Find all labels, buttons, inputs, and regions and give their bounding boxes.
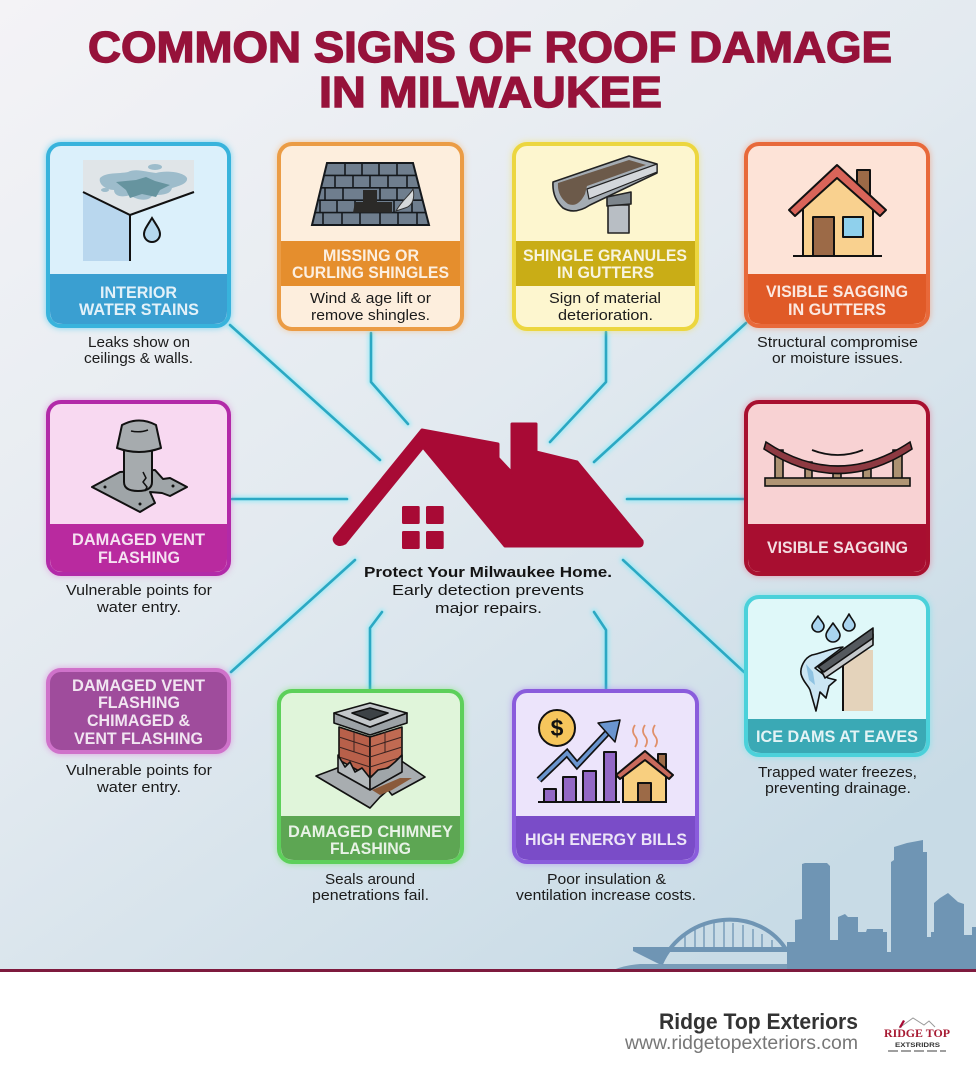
heading [72, 531, 205, 567]
panel: shingle granules in gutters [512, 142, 699, 331]
heading: DAMAGED VENT [72, 531, 205, 549]
title: IN MILWAUKEE [319, 68, 662, 117]
heading [79, 284, 199, 319]
heading: SHINGLE GRANULES [523, 247, 687, 265]
description [66, 583, 212, 616]
icon: brick chimney with damaged flashing [316, 703, 425, 808]
description: Vulnerable points for [66, 583, 212, 599]
description [549, 291, 661, 324]
heading: IN GUTTERS [788, 301, 886, 319]
description: Seals around [325, 872, 415, 888]
central message: major repairs. [435, 600, 542, 617]
description: or moisture issues. [772, 351, 903, 367]
title [88, 23, 892, 117]
heading [292, 247, 449, 282]
panel: interior water stains [46, 142, 231, 367]
description: Poor insulation & [547, 872, 666, 888]
title: COMMON SIGNS OF ROOF DAMAGE [88, 23, 892, 72]
panel: visible sagging [744, 400, 930, 576]
heading: MISSING OR [323, 247, 419, 265]
heading: CHIMAGED & [87, 712, 190, 730]
description: ventilation increase costs. [516, 888, 696, 904]
panel: missing or curling shingles [277, 142, 464, 331]
footer company name and url: Ridge Top Exteriors [659, 1009, 858, 1034]
description: preventing drainage. [765, 781, 911, 797]
heading: DAMAGED CHIMNEY [288, 823, 453, 841]
description [312, 872, 429, 904]
panel: damaged vent flashing [46, 400, 231, 616]
central house icon [334, 424, 642, 549]
logo: Ridge Top Exteriors: EXTSRIDRS [895, 1042, 941, 1049]
description [66, 763, 212, 796]
panel: high energy bills [512, 689, 699, 904]
panel: visible sagging in gutters [744, 142, 930, 367]
central message: Protect Your Milwaukee Home. [364, 564, 612, 581]
heading [288, 823, 453, 858]
description [84, 335, 193, 367]
heading: FLASHING [98, 549, 180, 567]
description: Wind & age lift or [310, 291, 431, 307]
description: Leaks show on [88, 335, 190, 351]
description [757, 335, 918, 367]
icon: ceiling water stain with drop [83, 160, 194, 261]
heading: VISIBLE SAGGING [767, 539, 908, 557]
description: Vulnerable points for [66, 763, 212, 779]
heading [766, 283, 908, 319]
footer company name and url: www.ridgetopexteriors.com [624, 1033, 858, 1054]
connector lines [230, 323, 746, 690]
description: Trapped water freezes, [758, 765, 917, 781]
heading: ICE DAMS AT EAVES [756, 728, 918, 746]
icon: roof shingles with hole [310, 162, 430, 226]
icon: sagging roof beam [764, 442, 912, 486]
heading: HIGH ENERGY BILLS [525, 831, 687, 849]
description: ceilings & walls. [84, 351, 193, 367]
heading [523, 247, 687, 282]
heading: FLASHING [98, 694, 180, 712]
description: Structural compromise [757, 335, 918, 351]
icon: rising energy costs [538, 710, 673, 802]
icon: cracked roof vent [92, 420, 187, 512]
heading: VISIBLE SAGGING [766, 283, 908, 301]
description: penetrations fail. [312, 888, 429, 904]
description [758, 765, 917, 797]
description: water entry. [96, 780, 181, 796]
heading: WATER STAINS [79, 301, 199, 319]
description: deterioration. [558, 308, 653, 324]
panel: ice dams at eaves [744, 595, 930, 797]
skyline of Milwaukee [613, 840, 976, 970]
heading: INTERIOR [100, 284, 177, 302]
icon: ice dam on eave [801, 614, 873, 711]
description: Sign of material [549, 291, 661, 307]
icon: house [789, 165, 886, 256]
description: water entry. [96, 600, 181, 616]
central message [364, 564, 612, 617]
heading: VENT FLASHING [74, 730, 203, 748]
central message: Early detection prevents [392, 582, 584, 599]
description: remove shingles. [311, 308, 430, 324]
logo: Ridge Top Exteriors [884, 1018, 950, 1051]
heading: DAMAGED VENT [72, 677, 205, 695]
panel: damaged vent flashing chimaged and vent flashing [46, 668, 231, 796]
icon: gutter with granules [553, 156, 657, 233]
logo: Ridge Top Exteriors: RIDGE TOP [884, 1028, 950, 1040]
footer company name and url [624, 1009, 858, 1054]
description [310, 291, 431, 324]
heading: IN GUTTERS [557, 264, 654, 282]
heading [72, 677, 205, 748]
panel: damaged chimney flashing [277, 689, 464, 904]
description [516, 872, 696, 904]
heading: CURLING SHINGLES [292, 264, 449, 282]
icon: rising energy costs: $ [551, 715, 564, 741]
heading: FLASHING [330, 840, 411, 858]
footer band [0, 969, 976, 972]
